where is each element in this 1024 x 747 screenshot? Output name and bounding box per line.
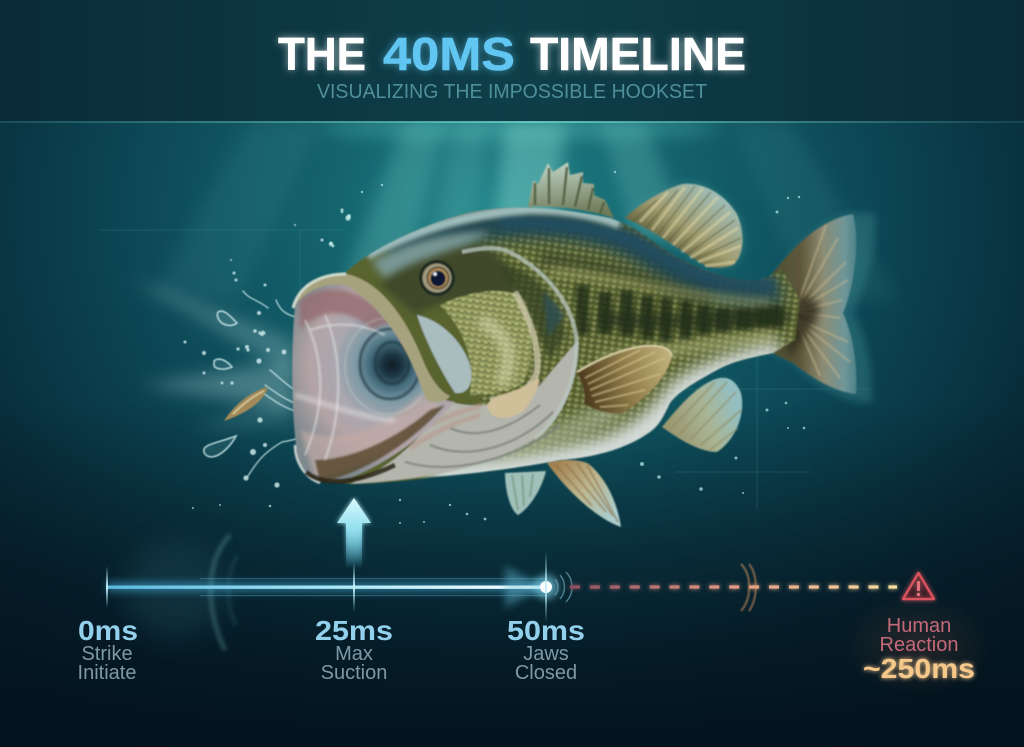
anal fin xyxy=(662,378,742,452)
label: 50ms xyxy=(507,615,585,684)
head dark olive xyxy=(380,244,516,315)
cream preopercle lobe xyxy=(487,379,539,418)
largemouth bass xyxy=(285,162,876,527)
back shading xyxy=(390,224,780,293)
label: 25ms: Max xyxy=(335,643,373,665)
splash spray streaks xyxy=(130,278,295,430)
faint measuring grid xyxy=(100,230,870,510)
end rings xyxy=(555,572,572,602)
label: 0ms: Initiate xyxy=(78,662,136,684)
warm glow behind reaction label xyxy=(843,595,993,695)
label: human reaction: Human xyxy=(887,615,951,637)
gill cover outline xyxy=(462,248,577,438)
eye xyxy=(419,260,455,296)
gill plate scales xyxy=(500,265,565,360)
label: 50ms: Closed xyxy=(515,662,577,684)
silver belly xyxy=(430,356,782,478)
glowing blue line xyxy=(107,566,558,608)
mouth interior xyxy=(292,283,456,480)
light rays xyxy=(150,116,900,300)
label: 0ms: Strike xyxy=(81,643,133,665)
upward arrow xyxy=(337,498,371,570)
second dorsal fin xyxy=(625,182,744,268)
background drifting particles xyxy=(192,171,805,524)
pectoral fin xyxy=(577,346,672,413)
subtitle: VISUALIZING THE IMPOSSIBLE HOOKSET xyxy=(317,81,707,103)
label: 25ms xyxy=(315,615,393,684)
water droplets and spray xyxy=(184,208,351,488)
warning icon xyxy=(903,573,934,599)
lower jaw dark rim xyxy=(306,465,395,481)
prey baitfish sliver xyxy=(224,387,268,421)
label: 25ms: Suction xyxy=(321,662,387,684)
lateral dark blotches xyxy=(576,285,783,343)
orange ripple marker xyxy=(741,564,756,611)
label: 0ms xyxy=(78,615,138,684)
body xyxy=(314,206,800,485)
upper jaw xyxy=(293,274,450,402)
small pelvic fin xyxy=(505,471,546,515)
label: human reaction: Reaction xyxy=(880,634,958,656)
title: TIMELINE xyxy=(530,28,746,80)
scales texture xyxy=(480,225,800,460)
label: human reaction: ~250ms xyxy=(863,653,975,684)
timeline xyxy=(106,498,934,650)
tail fin xyxy=(770,213,876,402)
label: 50ms: 50ms xyxy=(507,615,585,646)
spiny dorsal fin xyxy=(528,162,614,218)
title: 40MS xyxy=(383,28,515,80)
label: 25ms: 25ms xyxy=(315,615,393,646)
dashed human reaction line xyxy=(570,585,897,589)
label: 50ms: Jaws xyxy=(523,643,569,665)
title: THE xyxy=(278,28,366,80)
lower pelvic fin xyxy=(547,460,621,527)
suction vortex xyxy=(345,318,431,414)
lower head silver xyxy=(350,340,578,484)
shockwave ripples xyxy=(211,535,238,650)
silver maxilla wedge xyxy=(417,315,471,393)
cheek scales xyxy=(440,291,532,395)
label: human reaction xyxy=(863,615,975,684)
timeline tick marks xyxy=(106,552,547,622)
header banner xyxy=(0,0,1024,123)
label: 0ms: 0ms xyxy=(78,615,138,646)
title xyxy=(278,28,746,80)
